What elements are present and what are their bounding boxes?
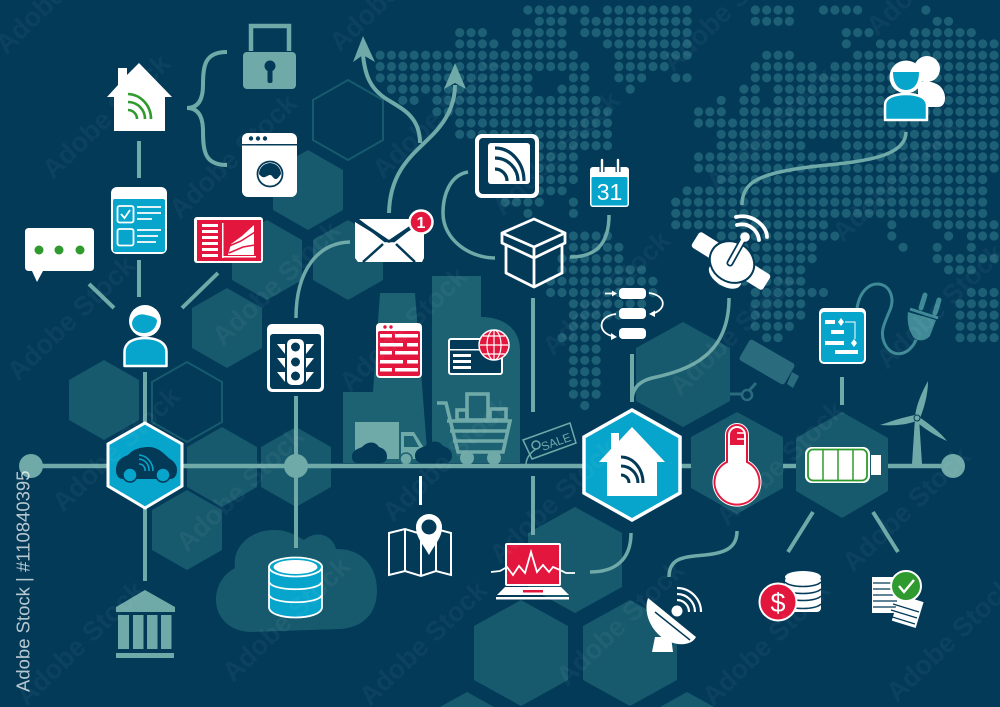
watermark: Adobe Stock [663,264,804,401]
icon: RSS square [475,134,539,198]
icon: envelope with notification: 1 [417,215,426,232]
background hexagons [69,150,734,707]
shopping cart [437,394,510,465]
watermark: Adobe Stock [366,47,507,184]
cloud [216,530,377,632]
arrows from envelope [353,36,466,213]
dotted world map [380,10,995,406]
outlined hexagons [152,80,383,442]
line nodes [19,454,965,478]
cars silhouette [352,442,452,463]
icon: web browser with globe [449,330,509,374]
icon: satellite dish [646,588,701,652]
icon: checklist [111,187,167,254]
hexagon: smart home [584,410,680,520]
icon: washing machine [242,133,297,197]
factory silhouette [343,276,520,463]
watermark: Adobe Stock [826,110,967,247]
icon: smart home top [107,63,172,131]
main horizontal line [31,464,953,468]
watermark: Adobe Stock [550,554,691,691]
icon: database [269,558,322,618]
watermark: Adobe Stock [376,390,517,527]
hexagon: connected car [108,423,182,508]
icon: user group [885,56,945,120]
icon: laptop with heartbeat [491,543,575,600]
icon: calendar: 31 [597,179,622,205]
watermark: Adobe Stock [36,47,177,184]
hexagon: thermometer backdrop [691,412,783,514]
watermark: Adobe Stock [486,84,627,221]
icon: red document list [376,323,422,378]
sale tag: SALE [539,430,573,454]
watermark: Adobe Stock [836,440,977,577]
icon: wind turbine [880,381,947,464]
icon: power plug with blue diagram [819,284,939,364]
watermark: Adobe Stock [170,420,311,557]
watermark: Adobe Stock [710,394,851,531]
icon: calendar [590,160,629,207]
stock id caption: Adobe Stock | #110840395 [12,470,34,692]
watermark: Adobe Stock [483,432,624,569]
icon: bank building [116,590,175,658]
icon: padlock [243,26,296,89]
watermark: Adobe Stock [46,380,187,517]
connector lines [89,52,906,581]
watermark: Adobe Stock [163,87,304,224]
icon: coins with dollar [760,571,821,620]
icon: envelope with notification [355,210,432,262]
watermark: Adobe Stock [700,60,841,197]
icon: red analytics chart [194,217,263,263]
icon: map with pin [389,476,451,576]
watermark: Adobe Stock [206,214,347,351]
delivery truck [355,422,424,465]
surveillance camera [730,339,799,400]
icon: approved documents [872,571,924,628]
watermark: Adobe Stock [216,550,357,687]
watermark: Adobe Stock [536,224,677,361]
icon: coins with dollar: $ [770,588,786,618]
watermark: Adobe Stock [1,249,142,386]
sale tag [523,423,576,465]
icon: battery [805,447,881,483]
icon: user [124,305,166,366]
icon: parcel box [502,219,565,287]
icon: traffic light [267,324,324,392]
icon: process flow [602,288,663,340]
icon: satellite [691,216,771,294]
icon: speech bubble [25,228,94,282]
watermark: Adobe Stock [333,260,474,397]
hexagon: battery backdrop [796,412,888,518]
icon: thermometer [714,425,759,505]
